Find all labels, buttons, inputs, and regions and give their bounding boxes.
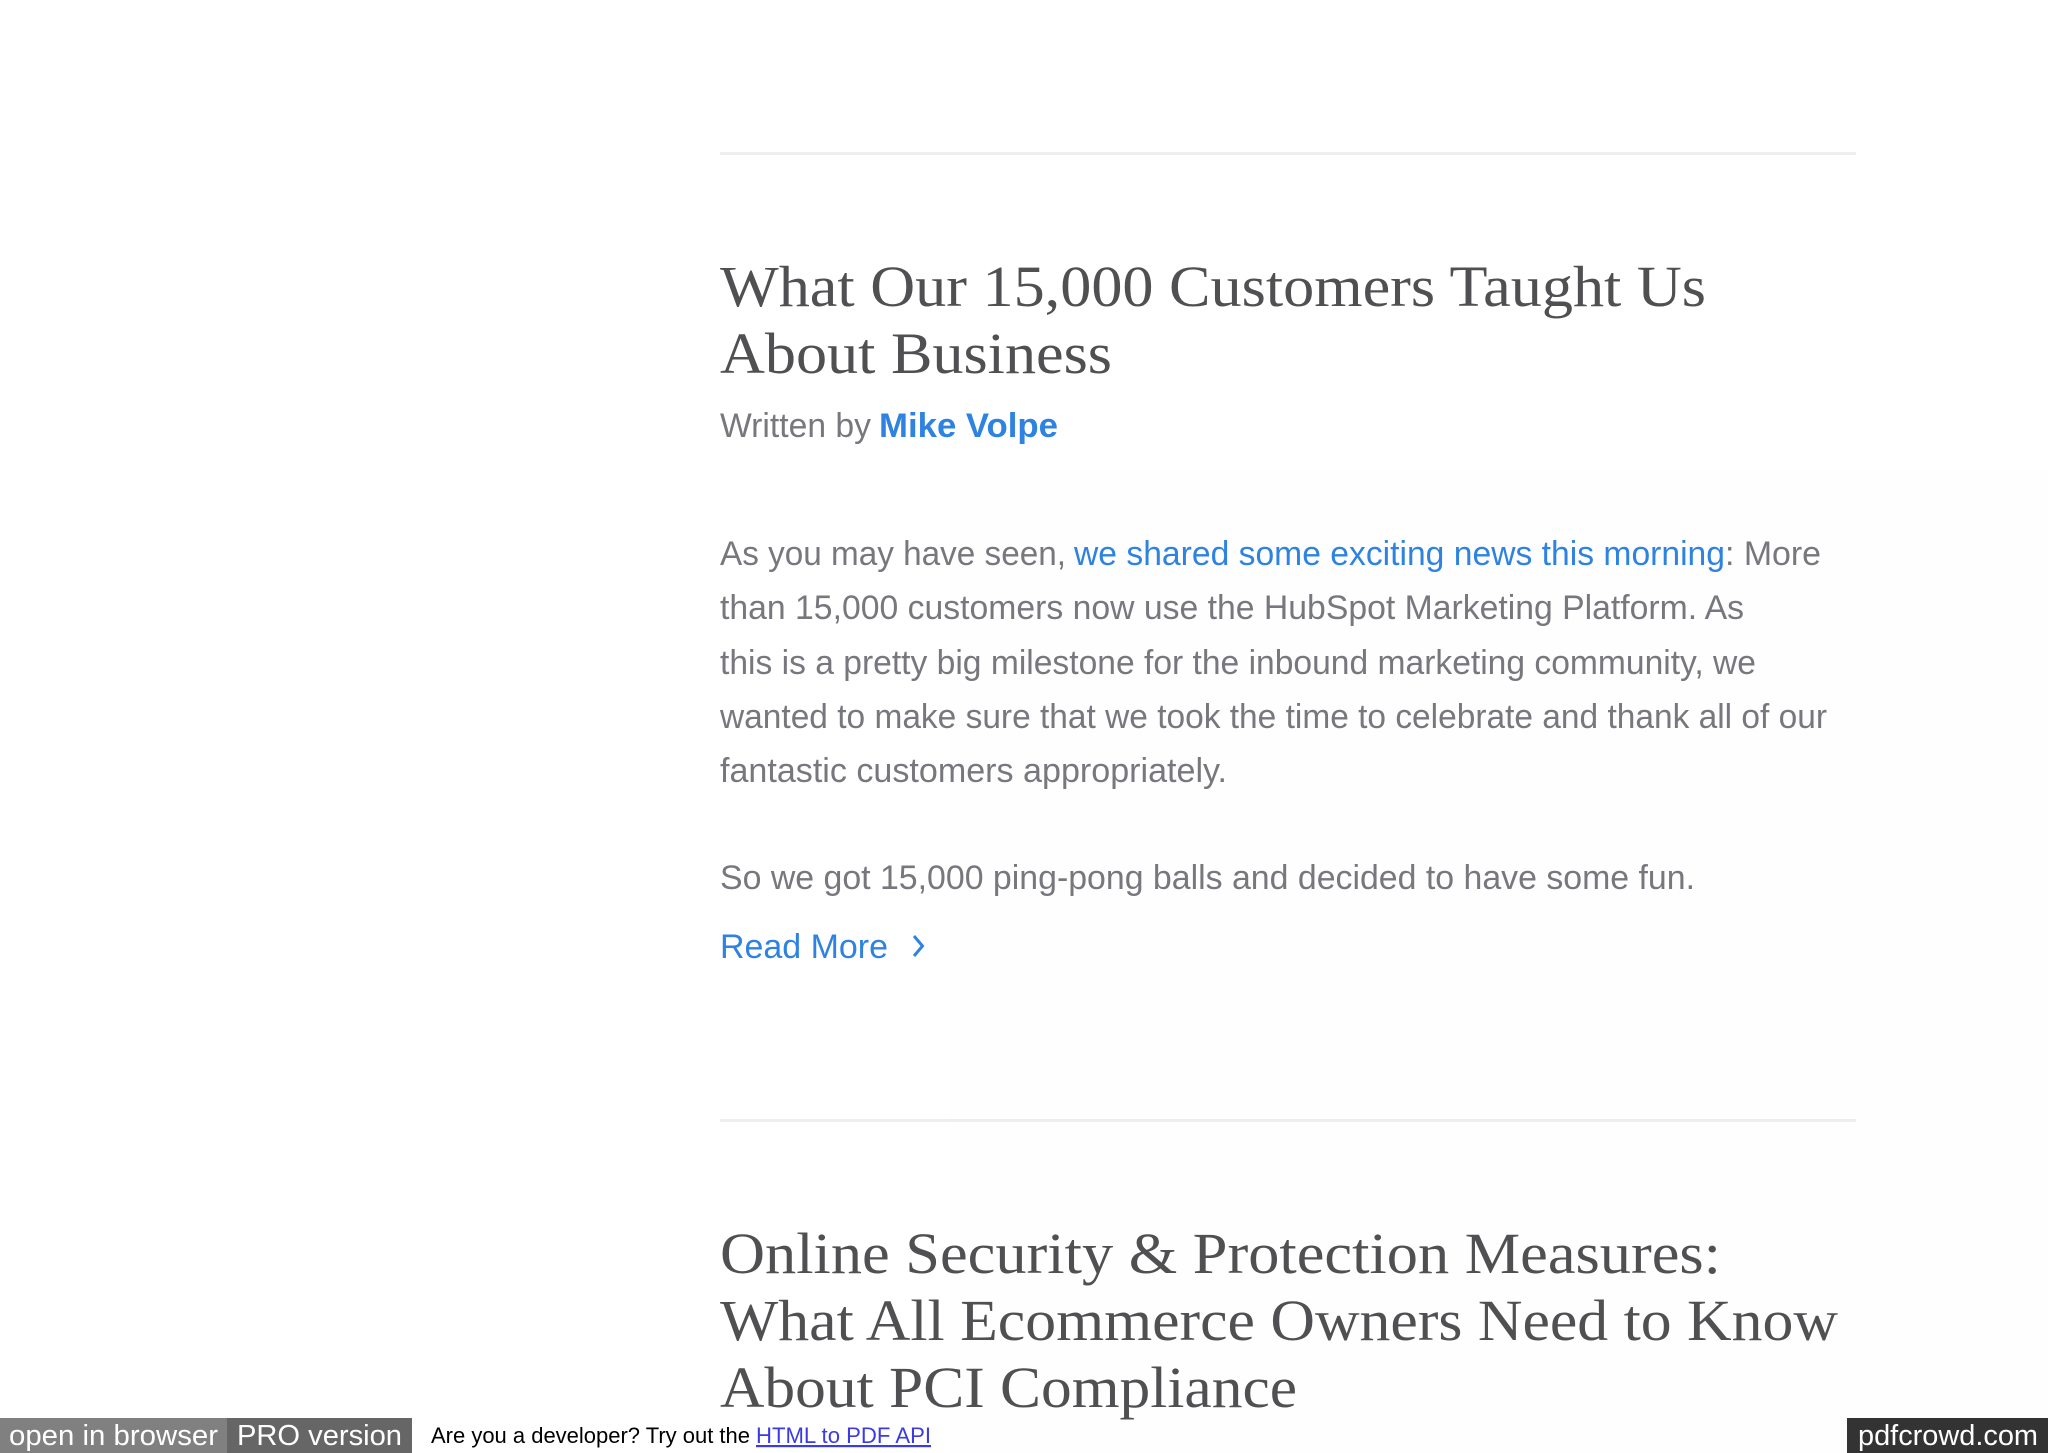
text block: intro paragraph: As you may have seen, (720, 535, 1066, 573)
text block: intro paragraph: : More (1725, 535, 1821, 573)
heading: second post title (720, 1221, 1838, 1420)
heading: second post title: About PCI Compliance (720, 1355, 1297, 1420)
text block: developer promo: HTML to PDF API (756, 1423, 931, 1448)
text block: intro paragraph: fantastic customers appropriately. (720, 752, 1227, 790)
footer bar: pdfcrowd banner (0, 1418, 2048, 1453)
byline: Mike Volpe (879, 407, 1058, 445)
panel: second blog post (720, 1221, 1838, 1420)
text block: ping-pong sentence: So we got 15,000 ping-pong balls and decided to have some fun. (720, 859, 1695, 897)
text block: intro paragraph (719, 535, 1827, 790)
heading: second post title: What All Ecommerce Owners Need to Know (720, 1288, 1838, 1353)
heading: first post title (720, 254, 1706, 386)
button: pdfcrowd.com: pdfcrowd.com (1858, 1420, 2038, 1452)
byline: Written by (720, 407, 872, 445)
byline (720, 407, 1058, 445)
text block: intro paragraph: this is a pretty big milestone for the inbound marketing community, we (720, 644, 1756, 682)
link: read more: Read More (720, 928, 888, 966)
button: PRO version: PRO version (237, 1420, 402, 1452)
heading: first post title: About Business (720, 321, 1112, 386)
text block: intro paragraph: we shared some exciting news this morning (1073, 535, 1725, 573)
heading: first post title: What Our 15,000 Customers Taught Us (720, 254, 1706, 319)
icon: chevron arrow (914, 936, 922, 956)
text block: intro paragraph: wanted to make sure that we took the time to celebrate and thank all of our (719, 698, 1827, 736)
heading: second post title: Online Security & Protection Measures: (720, 1221, 1721, 1286)
button: open in browser: open in browser (9, 1420, 218, 1452)
text block: developer promo (431, 1423, 931, 1448)
text block: developer promo: Are you a developer? Try out the (431, 1423, 750, 1448)
text block: intro paragraph: than 15,000 customers now use the HubSpot Marketing Platform. As (720, 589, 1744, 627)
panel: first blog post (719, 254, 1827, 966)
